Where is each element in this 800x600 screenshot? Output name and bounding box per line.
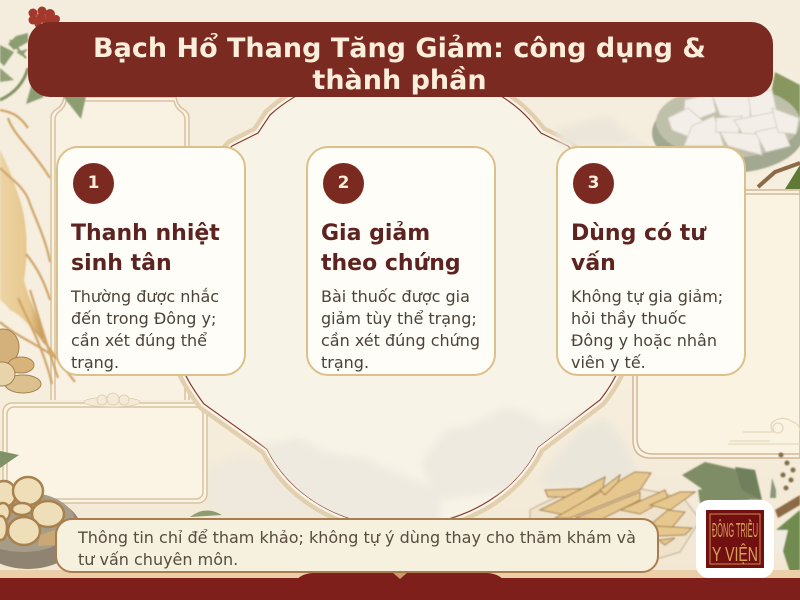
- badge 3: 3: [588, 173, 599, 193]
- card 1 text: Thường được nhắc đến trong Đông y; cần xét đúng thể trạng.: [71, 287, 219, 372]
- card 2: [306, 146, 496, 376]
- card 1: [56, 146, 246, 376]
- ornament: cloud on bottom-left frame: [84, 393, 140, 407]
- bowl: white mineral top-right: [618, 72, 800, 173]
- card 2 heading: Gia giảm theo chứng: [321, 221, 461, 276]
- mist peak near top right: [555, 116, 640, 146]
- sprig: left leaves and stem: [0, 33, 86, 119]
- title banner: Bạch Hổ Thang Tăng Giảm: công dụng & thành phần: [93, 33, 706, 96]
- mist mountains: [255, 408, 600, 525]
- panel frame: bottom left: [3, 403, 207, 503]
- panel frame: right: [633, 190, 800, 458]
- footer band: [0, 570, 800, 600]
- ginseng root: [0, 110, 75, 384]
- berries: [28, 6, 60, 28]
- branch and leaf top-right: [758, 163, 800, 189]
- mist mountains right of arch: [540, 418, 640, 490]
- leaf near left bowl: [0, 451, 19, 468]
- badge 1: 1: [88, 173, 99, 193]
- ginseng slices: [0, 329, 41, 393]
- logo: Đông Triều Y Viện seal: [696, 500, 774, 578]
- title banner: [28, 22, 773, 97]
- badge 2: [323, 163, 364, 204]
- soft mist outside the arch: [205, 455, 330, 515]
- foliage bottom-right: [682, 452, 800, 572]
- card 3: [556, 146, 746, 376]
- card 1 heading: Thanh nhiệt sinh tân: [71, 221, 220, 276]
- panel frame: top left: [51, 97, 189, 400]
- disclaimer note: [55, 518, 659, 573]
- badge 3: [573, 163, 614, 204]
- card 3 text: Không tự gia giảm; hỏi thầy thuốc Đông y hoặc nhân viên y tế.: [571, 287, 723, 372]
- bowl: sliced herb bottom-left: [0, 477, 82, 569]
- card 2 text: Bài thuốc được gia giảm tùy thể trạng; cần xét đúng chứng trạng.: [321, 287, 480, 372]
- central arched frame: [166, 70, 634, 526]
- badge 2: 2: [338, 173, 349, 193]
- ornament: clouds on right frame: [728, 418, 800, 444]
- bowl: sliced root sticks bottom-right: [530, 472, 700, 558]
- card 3 heading: Dùng có tư vấn: [571, 221, 706, 276]
- disclaimer note: Thông tin chỉ để tham khảo; không tự ý dùng thay cho thăm khám và tư vấn chuyên môn.: [78, 528, 636, 569]
- badge 1: [73, 163, 114, 204]
- leaf behind note: [190, 510, 222, 517]
